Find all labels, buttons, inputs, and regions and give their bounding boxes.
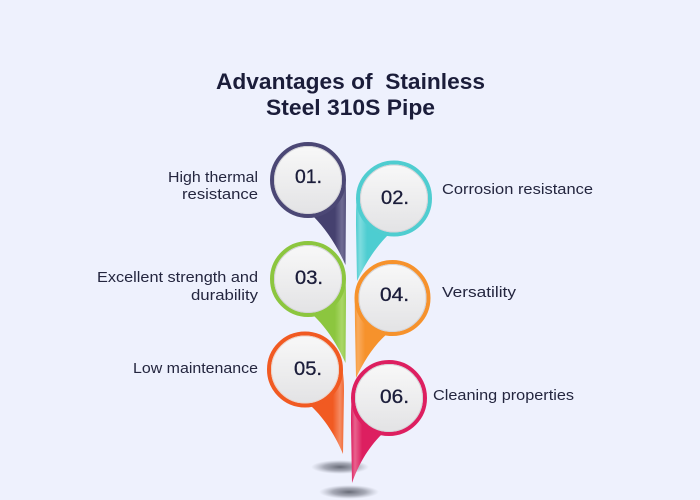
label: high thermal resistance: resistance <box>182 187 258 203</box>
pin 04: 04. <box>380 285 409 306</box>
pin 05 <box>269 334 344 454</box>
title: Steel 310S Pipe <box>266 95 435 120</box>
pin 03: 03. <box>295 268 323 289</box>
label: excellent strength and durability <box>97 270 259 304</box>
pin 03 <box>272 243 346 363</box>
pin 05: 05. <box>294 359 322 380</box>
shadow under pin 05 <box>311 460 369 474</box>
label: corrosion resistance: Corrosion resistance <box>442 182 593 198</box>
pin 06: 06. <box>380 387 409 408</box>
shadow under pin 06 <box>319 485 379 499</box>
pin 02: 02. <box>381 188 409 209</box>
label: low maintenance: Low maintenance <box>133 361 258 377</box>
title <box>216 69 485 120</box>
label: high thermal resistance <box>168 170 258 203</box>
pin 01: 01. <box>295 167 322 188</box>
label: versatility: Versatility <box>442 285 517 301</box>
pin 06 <box>351 362 425 483</box>
label: excellent strength and durability: Excellent strength and <box>97 270 258 286</box>
label: high thermal resistance: High thermal <box>168 170 258 186</box>
pin 01 <box>272 144 346 265</box>
title: Advantages of Stainless <box>216 69 485 94</box>
pin 02 <box>356 162 430 281</box>
pin 04 <box>355 262 428 378</box>
label: cleaning properties: Cleaning properties <box>433 388 574 404</box>
label: excellent strength and durability: durability <box>191 288 259 304</box>
